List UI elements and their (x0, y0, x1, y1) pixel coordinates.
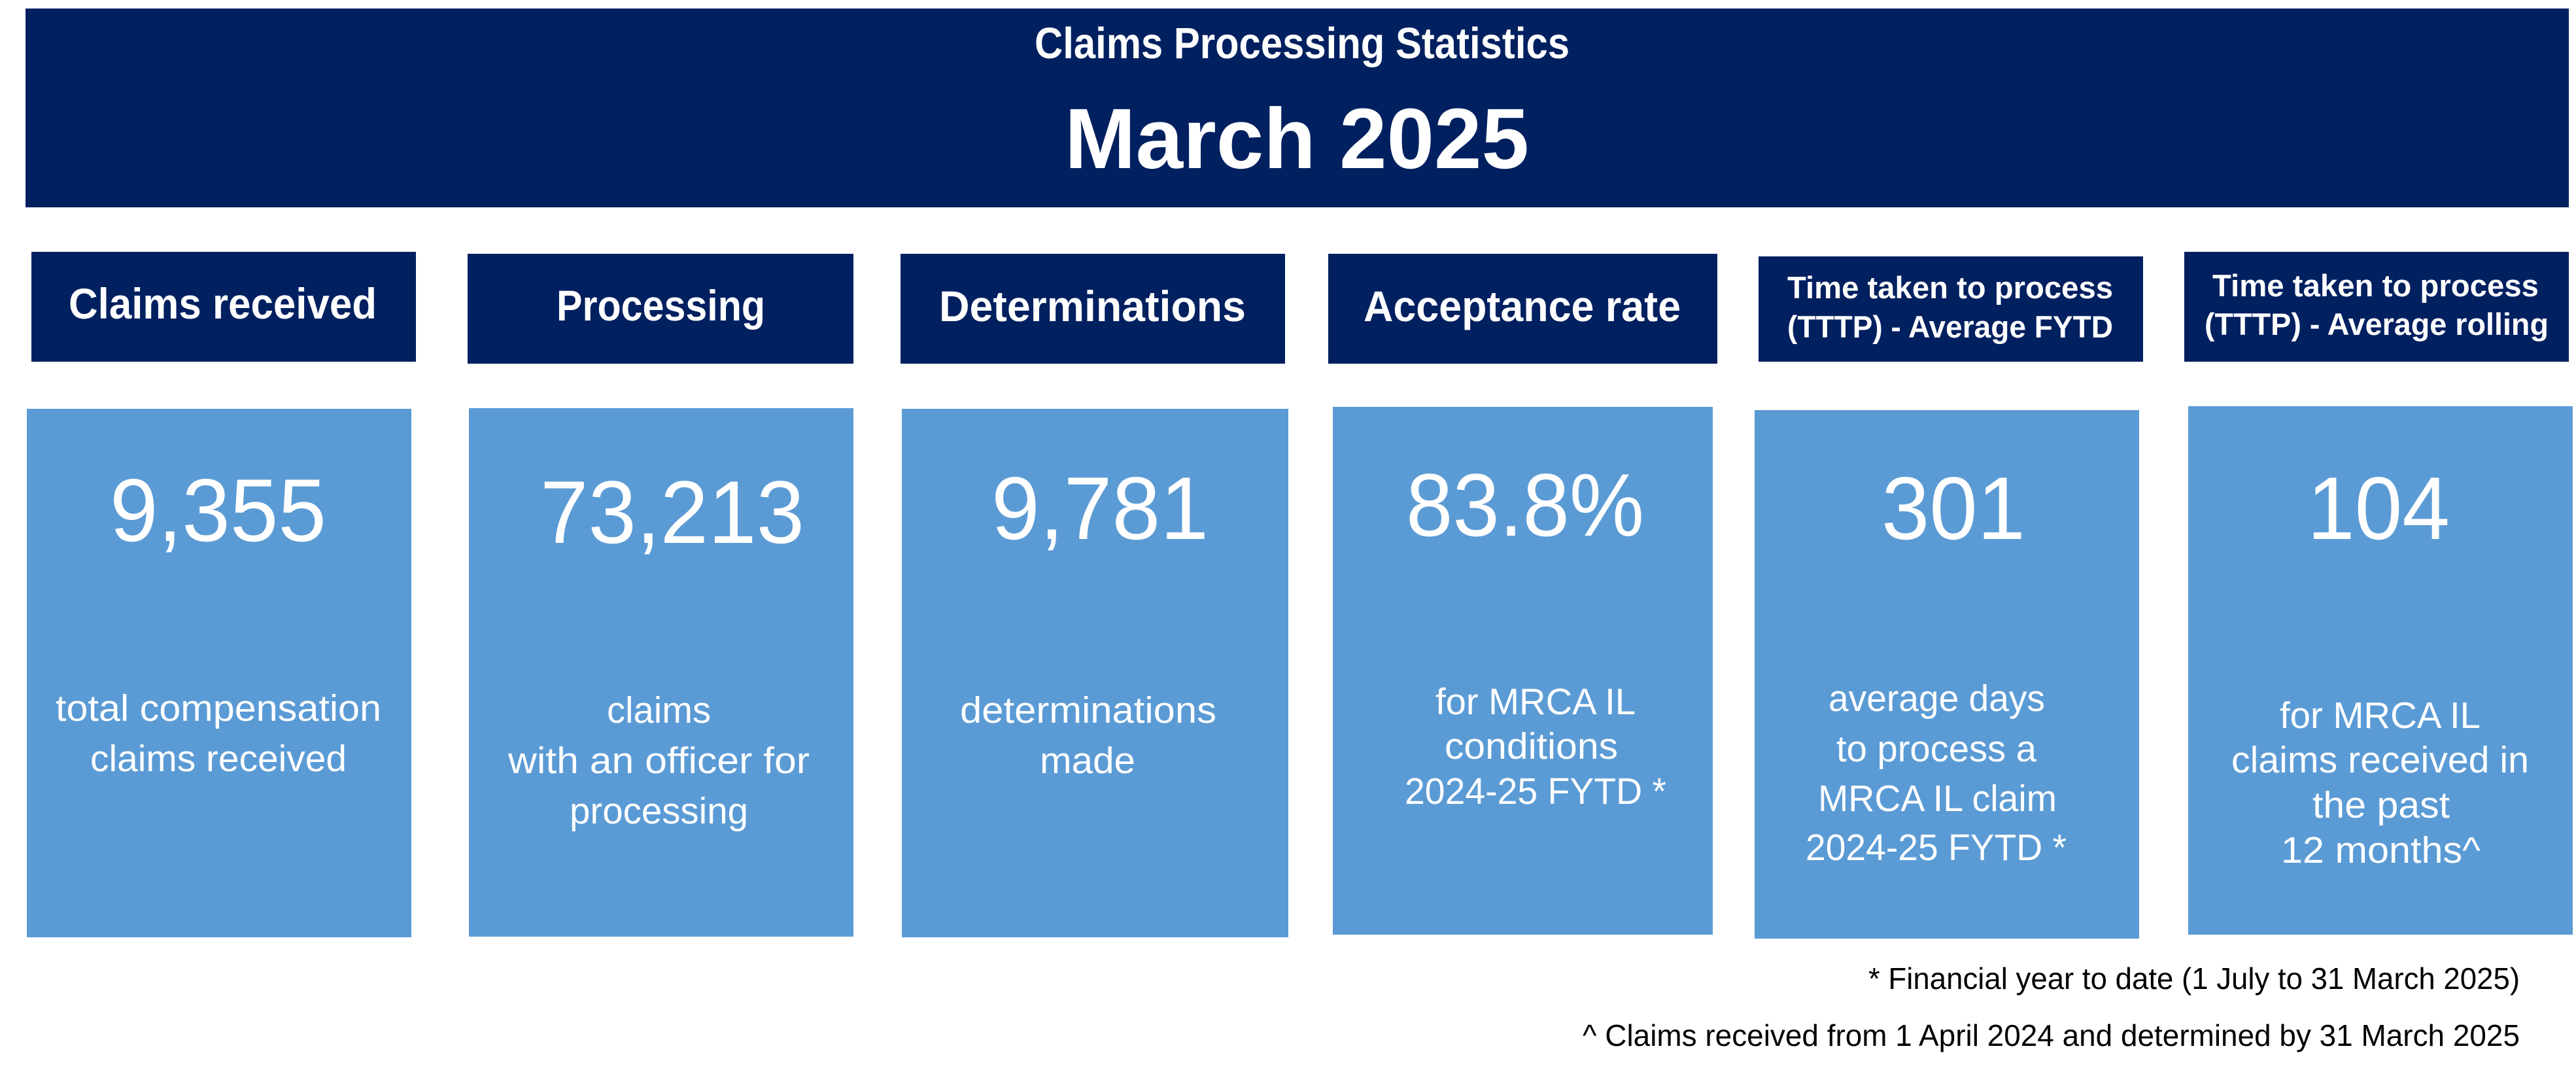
heading: Time taken to process (TTTP) - Average rolling (2184, 252, 2569, 362)
description: total compensation claims received (56, 687, 381, 780)
heading: Acceptance rate: Acceptance rate (1364, 282, 1681, 330)
heading: Claims received (31, 252, 416, 362)
description: for MRCA IL conditions 2024-25 FYTD: conditions (1445, 725, 1618, 767)
description: average days to process a MRCA IL claim 2024-25 FYTD: to process a (1836, 728, 2036, 770)
description: for MRCA IL claims received in the past 12 months: claims received in (2231, 739, 2529, 781)
panel: Determinations value (902, 409, 1288, 937)
column: Acceptance rate (1328, 254, 1717, 935)
footnote: financial year to date: * Financial year to date (1 July to 31 March 2025) (1868, 961, 2520, 996)
description: for MRCA IL claims received in the past 12 months: 12 months^ (2281, 829, 2481, 871)
number: 73,213: 73,213 (540, 462, 804, 562)
description: for MRCA IL conditions 2024-25 FYTD: for MRCA IL (1435, 681, 1636, 723)
description: determinations made (960, 689, 1216, 782)
description: claims with an officer for processing: processing (570, 790, 748, 832)
heading: Processing (468, 254, 853, 364)
heading: Time taken to process (TTTP) - Average FYTD: Time taken to process (1787, 270, 2113, 305)
title: Claims Processing Statistics: Claims Processing Statistics (1035, 19, 1570, 68)
description: average days to process a MRCA IL claim 2024-25 FYTD: 2024-25 FYTD * (1806, 827, 2067, 869)
heading: Time taken to process (TTTP) - Average rolling: (TTTP) - Average rolling (2205, 307, 2549, 341)
heading: Processing: Processing (557, 281, 765, 330)
heading: Determinations (901, 254, 1285, 364)
description: for MRCA IL conditions 2024-25 FYTD (1405, 681, 1666, 812)
description: average days to process a MRCA IL claim 2024-25 FYTD: MRCA IL claim (1818, 778, 2057, 820)
number: 301: 301 (1881, 459, 2025, 558)
number: 9,781: 9,781 (991, 459, 1209, 558)
panel: TTTP rolling value (2188, 406, 2573, 935)
description: determinations made: determinations (960, 689, 1216, 731)
column: TTTP average FYTD (1755, 256, 2143, 939)
description: claims with an officer for processing: with an officer for (507, 740, 810, 782)
panel: Claims received value (27, 409, 411, 937)
description: claims with an officer for processing (507, 689, 810, 832)
heading: Time taken to process (TTTP) - Average rolling: Time taken to process (2212, 268, 2539, 303)
description: for MRCA IL conditions 2024-25 FYTD: 2024-25 FYTD * (1405, 771, 1666, 812)
column: Claims received (27, 252, 416, 937)
column: TTTP average rolling (2184, 252, 2573, 935)
column: Determinations (901, 254, 1288, 937)
description: determinations made: made (1040, 740, 1135, 782)
number: 104: 104 (2307, 459, 2450, 558)
number: 9,355: 9,355 (110, 460, 326, 560)
panel: Acceptance rate value (1333, 407, 1713, 935)
number: 83.8%: 83.8% (1406, 455, 1644, 555)
description: claims with an officer for processing: claims (607, 689, 711, 731)
panel: Processing value (469, 408, 853, 937)
description: for MRCA IL claims received in the past 12 months (2231, 695, 2529, 871)
heading: Claims received: Claims received (69, 279, 377, 328)
description: total compensation claims received: claims received (90, 738, 347, 780)
description: for MRCA IL claims received in the past 12 months: the past (2312, 784, 2450, 826)
footnote: claims received window: ^ Claims received from 1 April 2024 and determined by 31 March 2025 (1583, 1018, 2520, 1052)
description: average days to process a MRCA IL claim 2024-25 FYTD: average days (1829, 678, 2045, 719)
panel: TTTP FYTD value (1755, 410, 2139, 939)
description: total compensation claims received: total compensation (56, 687, 381, 729)
heading: Determinations: Determinations (939, 282, 1246, 330)
column: Processing (468, 254, 853, 937)
description: for MRCA IL claims received in the past 12 months: for MRCA IL (2280, 695, 2481, 736)
title banner (26, 9, 2569, 207)
description: average days to process a MRCA IL claim 2024-25 FYTD (1806, 678, 2067, 869)
heading: Time taken to process (TTTP) - Average FYTD: (TTTP) - Average FYTD (1787, 309, 2113, 344)
heading: Time taken to process (TTTP) - Average FYTD (1759, 256, 2143, 362)
heading: Acceptance rate (1328, 254, 1717, 364)
title: March 2025: March 2025 (1065, 90, 1529, 186)
